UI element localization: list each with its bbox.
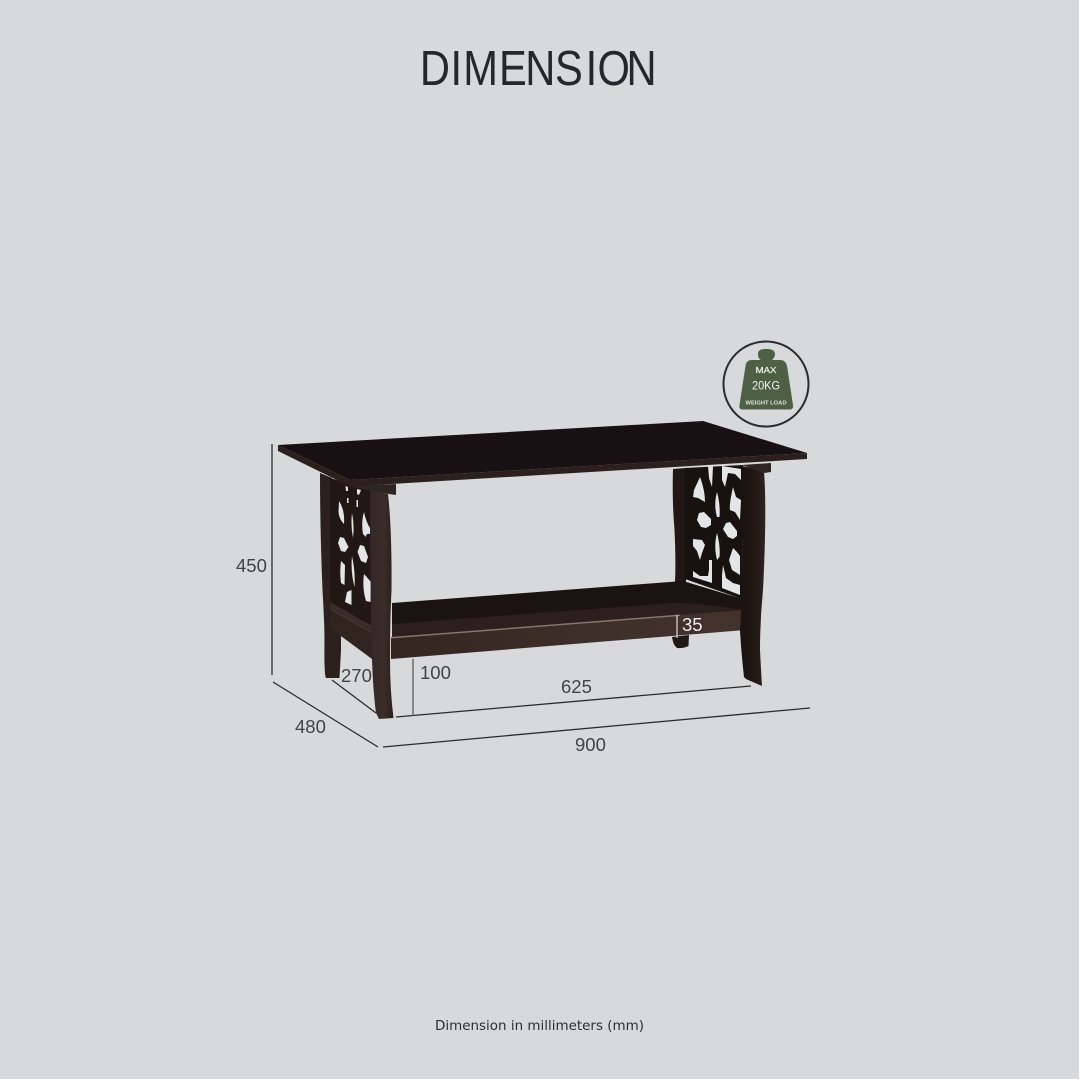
title: DIMENSION (420, 41, 657, 96)
left cleat (350, 484, 396, 495)
tabletop surface (278, 421, 807, 480)
back left leg (320, 473, 341, 678)
left fretwork panel (330, 478, 372, 626)
dimension labels: 450 (236, 555, 267, 576)
dimension labels: 900 (575, 734, 606, 755)
right fretwork panel (685, 465, 743, 599)
weight load badge: 20KG (752, 380, 780, 392)
dimension labels (236, 555, 703, 755)
front left leg (370, 490, 394, 719)
dimension labels: 35 (682, 614, 703, 635)
weight load badge (724, 342, 808, 426)
shelf front rail (391, 610, 745, 659)
shelf back and surface (392, 581, 746, 642)
dimension labels: 270 (341, 665, 372, 686)
right cleat (742, 463, 771, 473)
dimension labels: 480 (295, 716, 326, 737)
dimension labels: 625 (561, 676, 592, 697)
left side rail (330, 609, 372, 659)
dimension lines (272, 444, 810, 747)
table (278, 421, 807, 719)
front right leg (740, 466, 765, 686)
tabletop edge (278, 445, 807, 486)
back right leg (672, 468, 689, 648)
dimension labels: 100 (420, 662, 451, 683)
caption: Dimension in millimeters (mm) (435, 1018, 644, 1034)
weight load badge: MAX (756, 366, 777, 375)
weight load badge: WEIGHT LOAD (746, 400, 786, 406)
